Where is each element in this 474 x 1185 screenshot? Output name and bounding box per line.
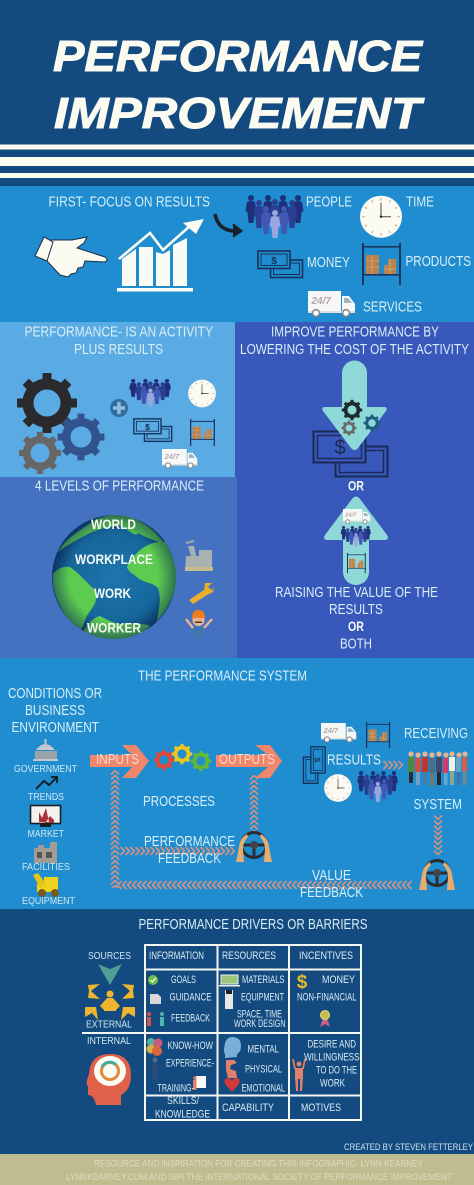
label: value feedback: [300, 868, 363, 901]
panel: activity plus results: [0, 322, 235, 477]
heading: activity plus results: PLUS RESULTS: [74, 342, 163, 358]
icon: steering wheel right: [419, 860, 455, 890]
icon: plus: [110, 399, 128, 417]
arrow: value feedback: [117, 880, 412, 890]
header row: INCENTIVES: [299, 950, 353, 962]
cell: skills and knowledge: KNOW-HOW: [168, 1040, 213, 1052]
icon: clock: [360, 196, 402, 238]
icon: curved arrow: [215, 214, 242, 237]
label: value feedback: VALUE: [312, 868, 351, 884]
icon: people: [246, 195, 304, 238]
arrow: outputs: OUTPUTS: [219, 752, 275, 768]
cell: capability factors: MENTAL: [248, 1044, 279, 1056]
cell: motives: DESIRE AND: [308, 1039, 356, 1051]
cell: skills and knowledge: TRAINING-: [158, 1083, 194, 1095]
icon: equipment loader: [33, 873, 59, 897]
title: IMPROVEMENT: [54, 89, 424, 138]
label: value feedback: FEEDBACK: [300, 885, 363, 901]
heading: lowering cost: IMPROVE PERFORMANCE BY: [271, 325, 439, 341]
arrow: inputs: [90, 745, 149, 778]
panel: the performance system: [0, 658, 474, 909]
title: [53, 32, 424, 138]
labels: levels: WORKER: [87, 620, 141, 636]
cell: resources: WORK DESIGN: [234, 1018, 286, 1030]
labels: sources: SOURCES: [88, 950, 131, 962]
icon: money: [258, 251, 302, 278]
icon: steering wheel left: [236, 832, 272, 862]
cell: incentives: $: [297, 972, 308, 993]
arrow: outputs: [216, 745, 282, 778]
arrow: up: [324, 496, 388, 585]
icons: results cluster: [303, 722, 398, 802]
heading: drivers or barriers: PERFORMANCE DRIVERS OR BARRIERS: [138, 917, 368, 933]
icon: wrench: [189, 583, 214, 604]
text: raising value: OR: [348, 618, 364, 634]
label: equipment: EQUIPMENT: [22, 895, 75, 907]
text: raising value: RESULTS: [329, 602, 383, 618]
label: system: SYSTEM: [414, 797, 462, 813]
text: raising value: [275, 585, 438, 653]
icon: worker: [186, 610, 212, 637]
label: performance feedback: [144, 834, 235, 867]
icon: gears in arrow: [342, 400, 380, 436]
text: raising value: RAISING THE VALUE OF THE: [275, 585, 438, 601]
bottom row: MOTIVES: [301, 1102, 341, 1114]
arrow: feedback up to inputs: [110, 770, 120, 888]
cell: incentives: MONEY: [322, 974, 356, 986]
icon: rising bar chart: [117, 219, 204, 292]
icon: delivery truck: [308, 291, 355, 316]
panel: drivers and barriers: [0, 909, 474, 1154]
icon: big money: [314, 432, 388, 476]
cell: motives: [293, 1039, 360, 1091]
arrow: performance feedback: [120, 846, 235, 856]
cell: motives: WILLINGNESS: [304, 1052, 360, 1064]
icon: facilities: [34, 842, 57, 863]
heading: four levels: 4 LEVELS OF PERFORMANCE: [35, 479, 204, 495]
cell: motives: TO DO THE: [316, 1065, 357, 1077]
heading: activity plus results: [24, 325, 213, 358]
heading: performance system: THE PERFORMANCE SYSTEM: [138, 669, 307, 685]
panel: four levels of performance: [0, 477, 237, 658]
footer: RESOURCE AND INSPIRATION FOR CREATING THIS INFOGRAPHIC- LYNN KEARNEY: [94, 1159, 424, 1170]
heading: conditions: BUSINESS: [25, 703, 85, 719]
labels: levels: WORK: [94, 585, 131, 601]
header row: [149, 950, 353, 962]
icon: globe: [52, 514, 177, 644]
label: trends: TRENDS: [28, 791, 64, 803]
cell: resources: SPACE, TIME: [237, 1009, 282, 1021]
panel: improve performance: [235, 322, 474, 658]
header row: RESOURCES: [222, 950, 276, 962]
icon: market monitor: [30, 806, 60, 827]
cell: incentives: [297, 972, 356, 1027]
label: results: RESULTS: [327, 752, 381, 768]
cell: capability factors: [224, 1037, 285, 1095]
icon: government building: [33, 739, 58, 761]
cell: skills and knowledge: EXPERIENCE-: [166, 1058, 214, 1070]
cell: information: FEEDBACK: [171, 1013, 210, 1025]
label: market: MARKET: [28, 828, 64, 840]
title: PERFORMANCE: [53, 32, 424, 81]
heading: first focus on results: FIRST- FOCUS ON RESULTS: [48, 195, 210, 211]
icon: external person: [85, 984, 135, 1020]
label: money: MONEY: [307, 255, 350, 271]
icon: source chevron: [98, 964, 122, 985]
labels: levels: WORKPLACE: [75, 551, 153, 567]
panel: first focus on results: [0, 186, 474, 322]
header panel: [0, 0, 474, 186]
arrow: outputs feedback: [249, 775, 259, 832]
arrow: system down: [433, 815, 443, 855]
label: external: EXTERNAL: [86, 1018, 132, 1030]
footer: [0, 1154, 474, 1185]
arrow: results to receiving: [383, 760, 403, 770]
cell: resources: [219, 974, 286, 1030]
text: or: OR: [348, 478, 364, 494]
cell: information: GOALS: [171, 974, 196, 986]
icon: pointing hand: [35, 237, 107, 277]
label: performance feedback: PERFORMANCE: [144, 834, 235, 850]
icon: process gears: [154, 744, 211, 771]
label: people: PEOPLE: [306, 195, 352, 211]
label: internal: INTERNAL: [87, 1035, 131, 1047]
icon: products shelf: [362, 243, 401, 285]
arrow: down: [322, 360, 387, 450]
arrow: inputs: INPUTS: [96, 752, 139, 768]
label: time: TIME: [406, 195, 434, 211]
label: performance feedback: FEEDBACK: [158, 851, 221, 867]
heading: lowering cost: [240, 325, 469, 358]
icon: trends arrow: [36, 777, 57, 789]
heading: conditions: [8, 686, 102, 736]
label: facilities: FACILITIES: [22, 861, 70, 873]
label: government: GOVERNMENT: [14, 763, 77, 775]
cell: skills and knowledge: [146, 1038, 214, 1095]
table: drivers grid: [82, 945, 361, 1121]
cell: motives: WORK: [320, 1078, 345, 1090]
icons: results: [129, 379, 216, 468]
heading: conditions: CONDITIONS OR: [8, 686, 102, 702]
icon: gears: [17, 373, 104, 474]
bottom row: [155, 1095, 341, 1121]
heading: activity plus results: PERFORMANCE- IS AN ACTIVITY: [24, 325, 213, 341]
text: raising value: BOTH: [340, 637, 372, 653]
icon: head with target: [87, 1054, 131, 1105]
heading: conditions: ENVIRONMENT: [12, 720, 99, 736]
bottom row: CAPABILITY: [222, 1102, 275, 1114]
cell: capability factors: PHYSICAL: [245, 1064, 282, 1076]
cell: capability factors: EMOTIONAL: [242, 1083, 285, 1095]
cell: information: [147, 974, 212, 1026]
cell: information: GUIDANCE: [170, 992, 212, 1004]
labels: levels: WORLD: [91, 516, 136, 532]
icon: factory: [185, 541, 213, 571]
cell: incentives: NON-FINANCIAL: [297, 992, 356, 1004]
icon: crowd: [408, 751, 468, 786]
icon: big money: $: [334, 437, 346, 459]
label: processes: PROCESSES: [143, 794, 215, 810]
label: services: SERVICES: [363, 300, 422, 316]
labels: levels: [75, 516, 153, 636]
header row: INFORMATION: [149, 950, 204, 962]
cell: resources: MATERIALS: [242, 974, 284, 986]
cell: resources: EQUIPMENT: [241, 992, 284, 1004]
icons in up arrow: [341, 509, 371, 573]
bottom row: KNOWLEDGE: [155, 1109, 210, 1121]
bottom row: SKILLS/: [167, 1095, 200, 1107]
